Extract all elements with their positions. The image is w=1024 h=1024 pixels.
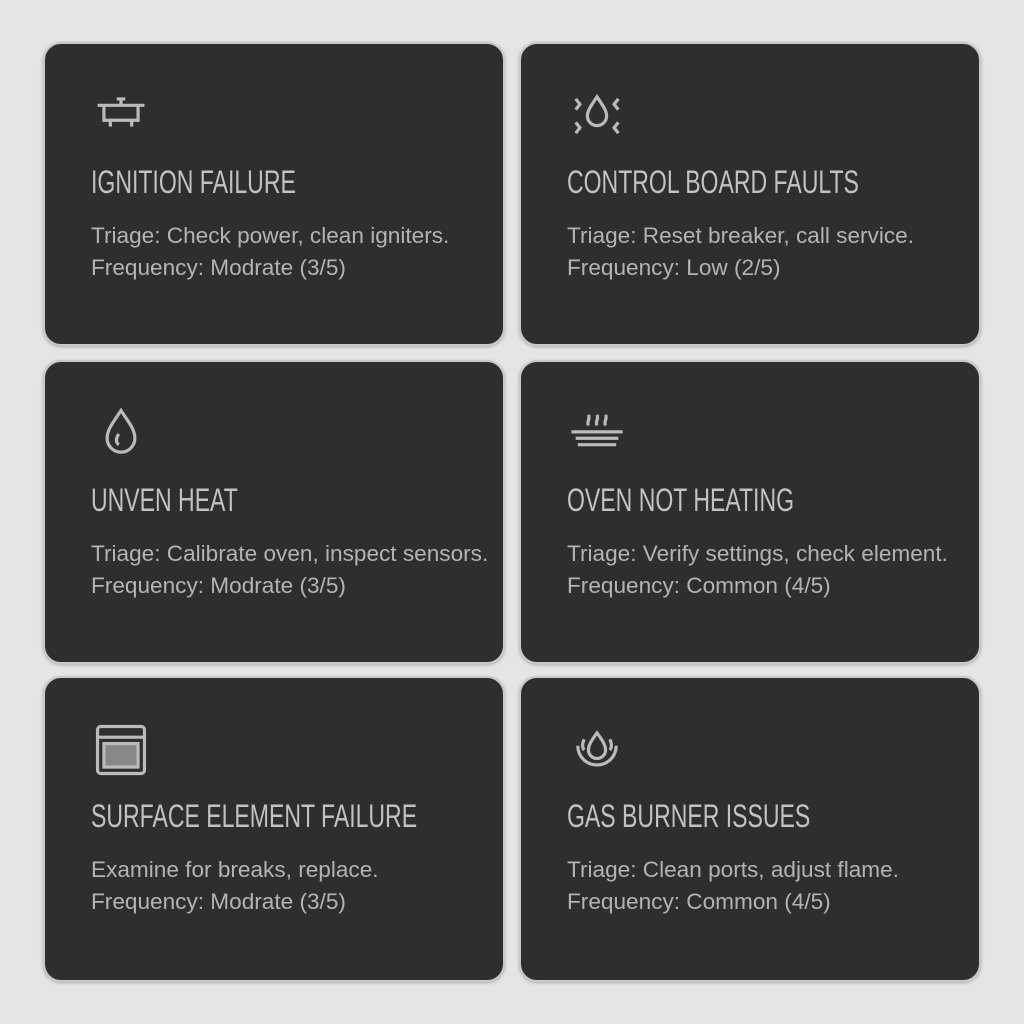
text xyxy=(91,541,488,598)
text xyxy=(91,223,449,280)
heading: OVEN NOT HEATING xyxy=(567,482,794,518)
text: Triage: Reset breaker, call service. xyxy=(567,223,914,248)
text: Triage: Clean ports, adjust flame. xyxy=(567,857,899,882)
text: Frequency: Modrate (3/5) xyxy=(91,889,346,914)
icon: flame drop xyxy=(106,408,136,454)
icon: oven xyxy=(96,724,146,776)
text: Frequency: Common (4/5) xyxy=(567,573,831,598)
text: Examine for breaks, replace. xyxy=(91,857,379,882)
icon: drop with sparks xyxy=(574,94,620,134)
icon: burner flame xyxy=(576,730,618,766)
card: uneven heat xyxy=(43,360,505,664)
heading: IGNITION FAILURE xyxy=(91,164,296,200)
card: control board faults xyxy=(519,42,981,346)
text: Frequency: Modrate (3/5) xyxy=(91,255,346,280)
text xyxy=(567,541,948,598)
text: Frequency: Common (4/5) xyxy=(567,889,831,914)
icon: pot xyxy=(98,97,144,127)
text xyxy=(567,223,914,280)
card: gas burner issues xyxy=(519,676,981,982)
card: surface element failure xyxy=(43,676,505,982)
icon: tray with steam xyxy=(571,414,623,446)
heading: CONTROL BOARD FAULTS xyxy=(567,164,859,200)
text: Frequency: Low (2/5) xyxy=(567,255,780,280)
text: Triage: Calibrate oven, inspect sensors. xyxy=(91,541,488,566)
text xyxy=(567,857,899,914)
heading: SURFACE ELEMENT FAILURE xyxy=(91,798,417,834)
card: ignition failure xyxy=(43,42,505,346)
text: Frequency: Modrate (3/5) xyxy=(91,573,346,598)
heading: UNVEN HEAT xyxy=(91,482,238,518)
text: Triage: Verify settings, check element. xyxy=(567,541,948,566)
text xyxy=(91,857,379,914)
card: oven not heating xyxy=(519,360,981,664)
text: Triage: Check power, clean igniters. xyxy=(91,223,449,248)
heading: GAS BURNER ISSUES xyxy=(567,798,810,834)
